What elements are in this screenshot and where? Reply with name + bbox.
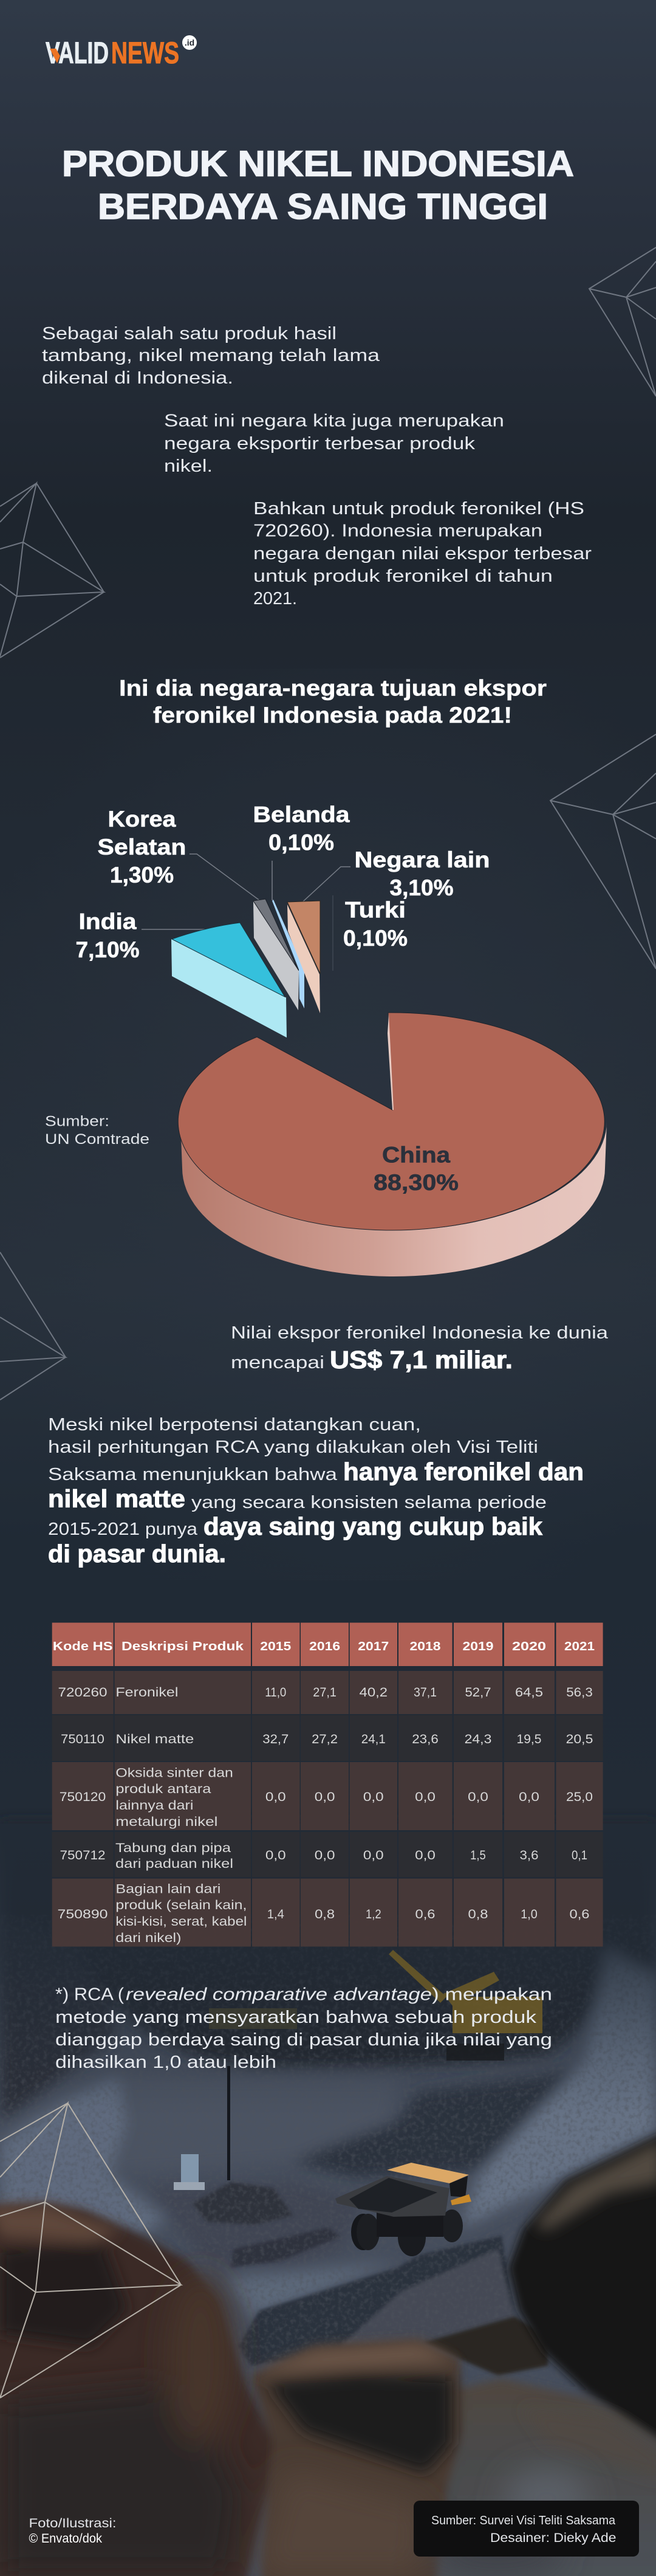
table row: 750712: 0,0 <box>363 1848 384 1862</box>
table row: 750712: 750712 <box>60 1848 106 1862</box>
footnote: RCA definition: metode yang mensyaratkan bahwa sebuah produk <box>55 2008 537 2027</box>
label: Negara lain: Negara lain <box>355 847 490 872</box>
text block: intro 2: Saat ini negara kita juga merupakan <box>164 411 504 430</box>
table row: 750110: 20,5 <box>566 1732 593 1746</box>
table header: 2015 <box>260 1640 291 1653</box>
table row: 720260: 40,2 <box>360 1686 388 1700</box>
table row: 750110: 27,2 <box>312 1732 338 1746</box>
text block: intro 3: 2021. <box>253 589 297 608</box>
label: India <box>75 909 140 962</box>
text block: intro 3: Bahkan untuk produk feronikel (HS <box>253 499 584 518</box>
table row: 750890: 0,8 <box>468 1907 488 1921</box>
table row: 750110: 32,7 <box>262 1732 289 1746</box>
table row: 750712: 0,0 <box>415 1848 436 1862</box>
table row: 750120 <box>52 1762 603 1830</box>
background photo: mine pit floor <box>0 1824 656 2576</box>
table header: 2016 <box>309 1640 340 1653</box>
table row: 750890: 1,2 <box>366 1907 381 1921</box>
text block: intro 1: dikenal di Indonesia. <box>42 368 233 388</box>
text block: RCA finding: yang secara konsisten selama periode <box>191 1493 547 1512</box>
table header: 2021 <box>564 1640 595 1653</box>
pie slice: India <box>171 923 287 1038</box>
table row: 720260: 11,0 <box>265 1686 286 1700</box>
decorative crystal: bottom left over photo <box>0 2103 181 2398</box>
icon: dump truck <box>335 2163 471 2256</box>
table row: 720260: 37,1 <box>414 1686 437 1700</box>
footnote: RCA definition <box>55 1985 552 2072</box>
table header: Kode HS <box>53 1640 113 1653</box>
text block: intro 2: negara eksportir terbesar produk <box>164 434 476 453</box>
table header: 2017 <box>358 1640 389 1653</box>
table row: 750890: 1,4 <box>267 1907 284 1921</box>
table row: 750712: dari paduan nikel <box>115 1857 233 1871</box>
table row: 750120: 0,0 <box>468 1790 488 1804</box>
icon: excavator and distant truck in the pit <box>209 1950 542 2061</box>
table header <box>52 1623 603 1666</box>
table row: 720260: 56,3 <box>566 1686 593 1700</box>
text block: RCA finding: 2015-2021 punya <box>48 1520 198 1539</box>
photo credit <box>29 2516 117 2546</box>
table: RCA values per product 2015-2021 <box>52 1623 603 1946</box>
text block: intro 3: untuk produk feronikel di tahun <box>253 567 553 586</box>
table row: 750890: 1,0 <box>521 1907 538 1921</box>
callout: export value <box>231 1323 609 1374</box>
decorative crystal: lower left <box>0 1252 66 1400</box>
table row: 750120: 0,0 <box>363 1790 384 1804</box>
table row: 750120: 750120 <box>60 1790 106 1804</box>
label: China: China <box>382 1143 450 1167</box>
text block: RCA finding: Meski nikel berpotensi datangkan cuan, <box>48 1415 421 1434</box>
table row: 750120: 0,0 <box>519 1790 539 1804</box>
table row: 750890: dari nikel) <box>115 1931 181 1945</box>
credits box: Desainer: Dieky Ade <box>490 2531 616 2545</box>
title: BERDAYA SAING TINGGI <box>98 187 548 227</box>
title <box>62 144 574 227</box>
table row: 750712: 0,0 <box>315 1848 335 1862</box>
text block: RCA finding: Saksama menunjukkan bahwa <box>48 1465 338 1484</box>
text block: RCA finding: hasil perhitungan RCA yang dilakukan oleh Visi Teliti <box>48 1438 538 1457</box>
table row: 750890: 750890 <box>57 1907 108 1921</box>
table row: 750110: 24,1 <box>361 1732 386 1746</box>
logo: Validnews.id: .id <box>185 38 194 47</box>
table row: 750120: 0,0 <box>265 1790 286 1804</box>
callout: export value: Nilai ekspor feronikel Indonesia ke dunia <box>231 1323 609 1343</box>
chart: 3D exploded pie of feronickel export destinations <box>75 802 607 1276</box>
label: China: 88,30% <box>374 1170 459 1195</box>
table row: 720260: Feronikel <box>115 1686 178 1700</box>
heading: export destinations: feronikel Indonesia pada 2021! <box>153 703 512 728</box>
label: Turki: 0,10% <box>343 926 408 951</box>
label: Belanda: 0,10% <box>268 830 334 855</box>
table row: 750120: metalurgi nikel <box>115 1815 217 1829</box>
table row: 750712: 0,1 <box>572 1848 587 1862</box>
logo: Validnews.id: NEWS <box>111 36 179 70</box>
text block: intro 2 <box>164 411 504 476</box>
footnote: RCA definition: ) merupakan <box>432 1985 552 2005</box>
photo credit: © Envato/dok <box>29 2532 102 2546</box>
pie slice: Turki <box>388 1014 394 1110</box>
table row: 750120: lainnya dari <box>115 1799 193 1813</box>
text block: intro 1: Sebagai salah satu produk hasil <box>42 324 337 343</box>
chart source: Sumber: <box>45 1114 109 1129</box>
pie slice: China top <box>178 1013 604 1230</box>
decorative crystal: top right <box>589 247 656 396</box>
label: Turki: Turki <box>345 897 406 923</box>
pie slice: Negara lain <box>287 901 320 1013</box>
label: India: 7,10% <box>75 937 140 962</box>
label: Korea Selatan: Korea <box>108 807 176 832</box>
decorative crystal: upper left <box>0 483 104 658</box>
label: India: India <box>79 909 137 934</box>
credits box <box>414 2501 639 2557</box>
table row: 750890 <box>52 1879 603 1946</box>
heading: export destinations: Ini dia negara-negara tujuan ekspor <box>119 676 547 701</box>
chart source: UN Comtrade <box>45 1131 149 1148</box>
heading: export destinations <box>119 676 547 728</box>
label: China <box>374 1143 459 1195</box>
table row: 720260: 720260 <box>58 1686 107 1700</box>
leader lines <box>142 854 350 971</box>
fade from background into photo <box>0 1824 656 2115</box>
table row: 750110: 19,5 <box>516 1732 542 1746</box>
label: Korea Selatan: 1,30% <box>110 863 174 887</box>
table header: Deskripsi Produk <box>121 1640 244 1653</box>
table row: 720260: 27,1 <box>313 1686 337 1700</box>
logo: Validnews.id <box>46 35 197 70</box>
table row: 750890: Bagian lain dari <box>115 1882 220 1896</box>
credits box: Sumber: Survei Visi Teliti Saksama <box>431 2514 616 2527</box>
table row: 750120: Oksida sinter dan <box>115 1766 233 1780</box>
table row: 750120: 25,0 <box>566 1790 593 1804</box>
footnote: RCA definition: dihasilkan 1,0 atau lebih <box>55 2053 276 2072</box>
logo: Validnews.id: VALID <box>46 36 109 70</box>
table row: 750890: 0,8 <box>315 1907 335 1921</box>
text block: RCA finding: daya saing yang cukup baik <box>203 1512 542 1540</box>
table row: 750120: produk antara <box>115 1782 211 1796</box>
label: Belanda: Belanda <box>253 802 350 827</box>
table row: 750110: Nikel matte <box>115 1732 194 1746</box>
table header: 2018 <box>409 1640 441 1653</box>
text block: intro 2: nikel. <box>164 456 213 476</box>
text block: intro 3: 720260). Indonesia merupakan <box>253 522 542 541</box>
table row: 750712: 1,5 <box>470 1848 486 1862</box>
label: Belanda <box>253 802 350 855</box>
table row: 750110 <box>52 1715 603 1761</box>
table row: 750120: 0,0 <box>415 1790 436 1804</box>
pie slice: Korea Selatan <box>253 899 299 1010</box>
chart source <box>45 1114 149 1148</box>
text block: RCA finding: hanya feronikel dan <box>343 1458 584 1486</box>
table header: 2019 <box>463 1640 493 1653</box>
icon: pole and electric box <box>174 2066 230 2190</box>
label: Negara lain <box>355 847 490 900</box>
table row: 750890: produk (selain kain, <box>115 1898 247 1912</box>
footnote: RCA definition: revealed comparative advantage <box>126 1985 432 2005</box>
text block: intro 1: tambang, nikel memang telah lama <box>42 346 380 365</box>
text block: RCA finding <box>48 1415 584 1568</box>
table row: 750120: 0,0 <box>315 1790 335 1804</box>
photo credit: Foto/Ilustrasi: <box>29 2516 117 2530</box>
table header: 2020 <box>512 1640 546 1653</box>
text block: intro 1 <box>42 324 380 388</box>
label: Korea Selatan <box>97 807 186 887</box>
label: Negara lain: 3,10% <box>390 875 453 900</box>
footnote: RCA definition: *) RCA ( <box>55 1985 124 2005</box>
table row: 750110: 24,3 <box>465 1732 491 1746</box>
title: PRODUK NIKEL INDONESIA <box>62 144 574 184</box>
table row: 750712: Tabung dan pipa <box>115 1841 231 1855</box>
table row: 720260: 52,7 <box>465 1686 491 1700</box>
pie slice: Belanda <box>272 900 304 1008</box>
callout: export value: US$ 7,1 miliar. <box>330 1346 513 1374</box>
label: Turki <box>343 897 408 951</box>
callout: export value: mencapai <box>231 1353 324 1372</box>
text block: intro 3 <box>253 499 592 608</box>
table row: 750890: kisi-kisi, serat, kabel <box>115 1915 247 1929</box>
decorative crystal: middle right <box>550 734 656 969</box>
text block: intro 3: negara dengan nilai ekspor terbesar <box>253 544 592 563</box>
footnote: RCA definition: dianggap berdaya saing di pasar dunia jika nilai yang <box>55 2030 552 2050</box>
table row: 750712: 0,0 <box>265 1848 286 1862</box>
table row: 720260 <box>52 1671 603 1714</box>
table row: 750890: 0,6 <box>570 1907 589 1921</box>
table row: 750712 <box>52 1832 603 1877</box>
label: Korea Selatan: Selatan <box>97 835 186 859</box>
pie slice: China side <box>180 1121 607 1276</box>
table row: 720260: 64,5 <box>515 1686 543 1700</box>
table row: 750712: 3,6 <box>520 1848 538 1862</box>
table row: 750110: 750110 <box>61 1732 104 1746</box>
text block: RCA finding: nikel matte <box>48 1484 185 1512</box>
table row: 750890: 0,6 <box>415 1907 435 1921</box>
text block: RCA finding: di pasar dunia. <box>48 1540 226 1568</box>
table row: 750110: 23,6 <box>412 1732 439 1746</box>
foreground blurred rocks <box>0 2127 656 2576</box>
